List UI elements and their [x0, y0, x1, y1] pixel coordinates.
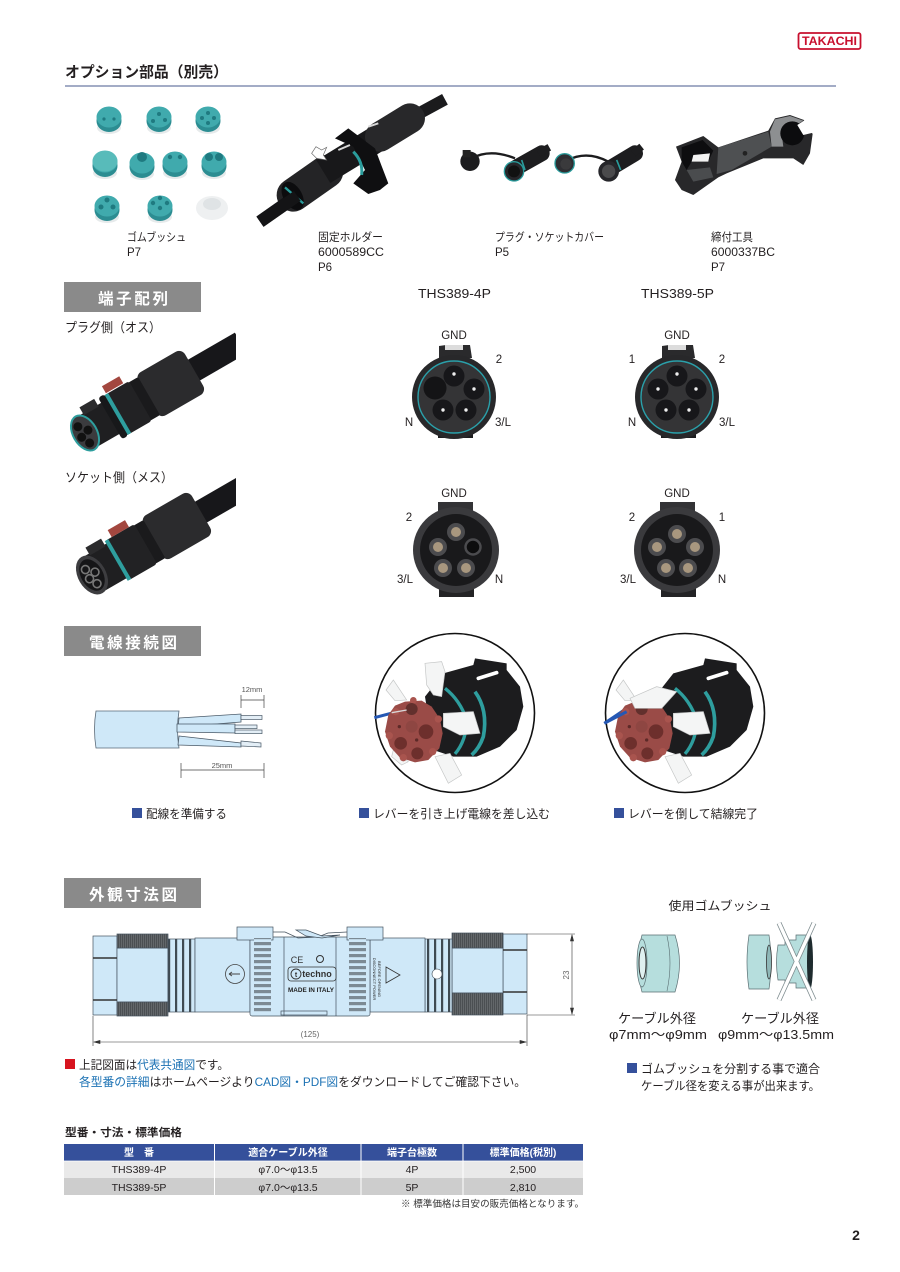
section heading: dimensions: 外観寸法図 [89, 885, 177, 904]
caption: step 3: レバーを倒して結線完了 [628, 806, 758, 821]
pin labels: GND [664, 330, 690, 342]
heading: options: オプション部品（別売） [65, 64, 228, 81]
heading: bushing used: 使用ゴムブッシュ [668, 898, 772, 913]
photo: fixing holder [260, 99, 445, 222]
diagram: external dimensions: DISCONNECT POWER [372, 958, 377, 1000]
photo: plug and socket covers [460, 147, 642, 182]
caption: tool: 6000337BC [711, 247, 775, 259]
note: split bushing: ケーブル径を変える事が出来ます。 [641, 1078, 820, 1093]
logo: TAKACHI [798, 33, 860, 49]
pin labels: N [405, 417, 413, 429]
caption: cover: プラグ・ソケットカバー [495, 230, 604, 244]
note: split bushing [627, 1061, 820, 1093]
diagram: cable preparation [94, 685, 264, 778]
table: models: THS389-5P [112, 1182, 166, 1194]
section heading: wiring: 電線接続図 [89, 633, 177, 652]
caption: cover: P5 [495, 247, 509, 259]
label: cable outer diameter, small: ケーブル外径 [618, 1011, 696, 1026]
photo: rubber bushings [92, 106, 228, 223]
caption: tool: P7 [711, 262, 725, 274]
pin labels: 3/L [719, 417, 736, 429]
page number: 2 [852, 1227, 860, 1243]
section heading: dimensions [64, 878, 201, 908]
diagram: bushing whole [637, 935, 680, 992]
diagram: 5P plug face [635, 345, 719, 439]
caption: bushing: P7 [127, 247, 141, 259]
table: models: 適合ケーブル外径 [248, 1146, 328, 1159]
diagram: cable preparation: 12mm [242, 685, 262, 694]
label: socket side: ソケット側（メス） [65, 470, 173, 485]
pin labels: 3/L [620, 574, 637, 586]
diagram: external dimensions: CE [291, 955, 303, 965]
table: models [64, 1144, 583, 1195]
pin labels: 2 [406, 512, 412, 524]
table: models: 型 番 [124, 1146, 154, 1159]
photo: tightening tool [675, 115, 813, 195]
table: models: φ7.0～φ13.5 [258, 1164, 318, 1176]
diagram: external dimensions: (125) [301, 1030, 320, 1039]
label: THS389-5P: THS389-5P [641, 286, 714, 301]
pin labels: 1 [719, 512, 725, 524]
table: models: 5P [406, 1182, 418, 1194]
pin labels: N [718, 574, 726, 586]
pin labels [397, 330, 736, 586]
note: price: ※ 標準価格は目安の販売価格となります。 [401, 1198, 584, 1210]
table: models: 端子台極数 [387, 1146, 437, 1159]
diagram: external dimensions [93, 927, 575, 1046]
section heading: terminal layout [64, 282, 201, 312]
pin labels: GND [441, 488, 467, 500]
photo: socket connector [76, 478, 236, 594]
pin labels: N [628, 417, 636, 429]
section heading: terminal layout: 端子配列 [98, 290, 168, 308]
pin labels: 3/L [397, 574, 414, 586]
caption: tool: 締付工具 [711, 230, 753, 244]
label: plug side: プラグ側（オス） [65, 320, 161, 335]
photo: plug connector [70, 332, 236, 452]
diagram: external dimensions: 23 [562, 970, 571, 979]
label: cable outer diameter, large: φ9mm～φ13.5mm [718, 1027, 834, 1042]
label: cable outer diameter, small: φ7mm～φ9mm [609, 1027, 707, 1042]
diagram: external dimensions: t [295, 972, 298, 979]
caption: bushing: ゴムブッシュ [127, 230, 186, 244]
note: drawing and download: 上記図面は代表共通図です。 [79, 1058, 229, 1072]
pin labels: GND [664, 488, 690, 500]
photo: lever lowered, wiring complete [604, 634, 764, 792]
panel: optional parts [92, 99, 813, 274]
note: drawing and download [65, 1058, 526, 1089]
logo: TAKACHI: TAKACHI [802, 36, 857, 48]
diagram: bushing split, crossed out [747, 923, 814, 1000]
pin labels: 2 [629, 512, 635, 524]
diagram: external dimensions: BEFORE OPENING [377, 961, 382, 997]
pin labels: N [495, 574, 503, 586]
diagram: cable preparation: 25mm [212, 761, 232, 770]
caption: step 1: 配線を準備する [146, 806, 227, 821]
diagram: external dimensions: MADE IN ITALY [288, 987, 335, 994]
note: drawing and download: 各型番の詳細はホームページよりCAD図・PDF図をダウンロードしてご確認下さい。 [79, 1074, 526, 1089]
note: split bushing: ゴムブッシュを分割する事で適合 [641, 1061, 820, 1076]
heading: table: 型番・寸法・標準価格 [65, 1125, 182, 1139]
diagram: 5P socket face [634, 502, 720, 597]
table: models: 2,810 [510, 1182, 536, 1194]
caption: holder: P6 [318, 262, 332, 274]
label: cable outer diameter, large: ケーブル外径 [741, 1011, 819, 1026]
photo: lever raised, wire inserted [374, 634, 534, 792]
table: models: φ7.0～φ13.5 [258, 1182, 318, 1194]
diagram: 4P socket face [413, 502, 499, 597]
pin labels: 3/L [495, 417, 512, 429]
table: models: THS389-4P [112, 1164, 166, 1176]
pin labels: 1 [629, 354, 635, 366]
caption: holder: 固定ホルダー [318, 230, 383, 244]
label: THS389-4P: THS389-4P [418, 286, 491, 301]
table: models: 標準価格(税別) [490, 1146, 556, 1159]
caption: holder: 6000589CC [318, 247, 384, 259]
caption: step 2: レバーを引き上げ電線を差し込む [373, 806, 550, 821]
table: models: 4P [406, 1164, 418, 1176]
section heading: wiring [64, 626, 201, 656]
diagram: external dimensions: techno [302, 969, 332, 979]
diagram: 4P plug face [412, 345, 496, 439]
pin labels: 2 [719, 354, 725, 366]
pin labels: 2 [496, 354, 502, 366]
table: models: 2,500 [510, 1164, 536, 1176]
pin labels: GND [441, 330, 467, 342]
